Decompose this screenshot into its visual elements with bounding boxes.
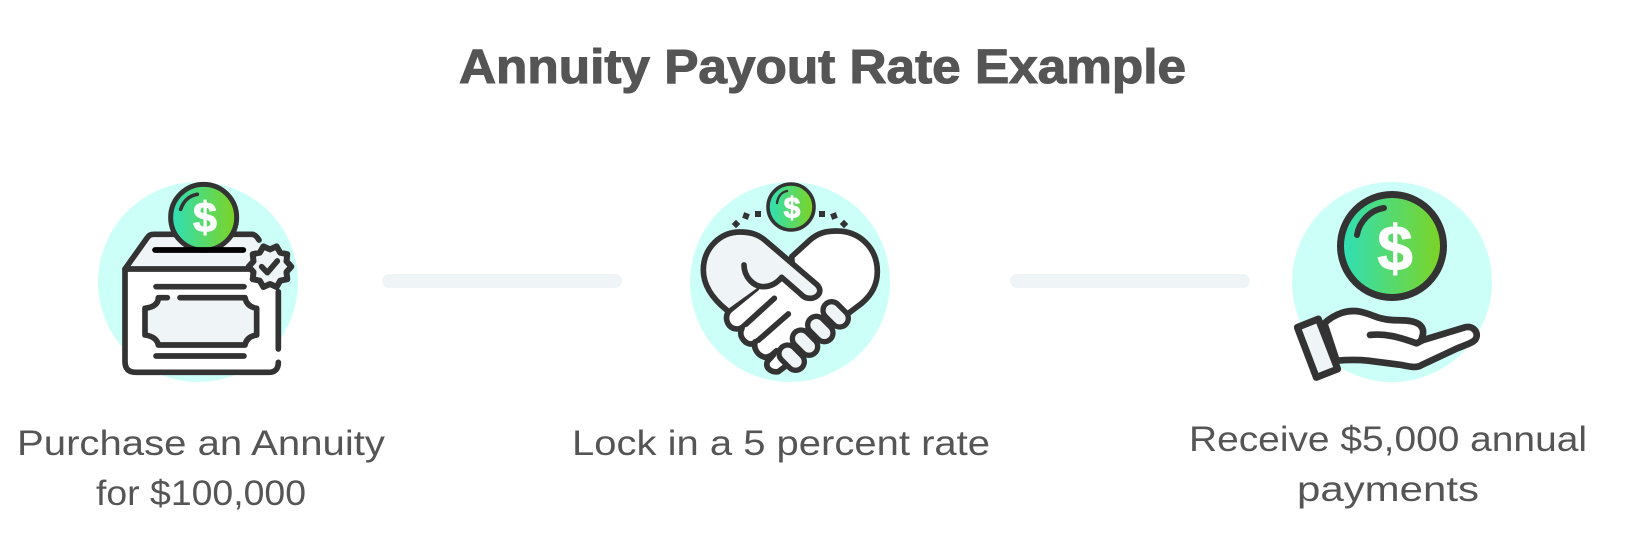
label: step 2: Lock in a 5 percent rate — [572, 424, 990, 463]
label: step 1: Purchase an Annuity — [17, 424, 386, 463]
label: step 3: payments — [1297, 470, 1479, 509]
icon: open hand receiving coin — [1292, 182, 1492, 382]
label: step 1: for $100,000 — [96, 474, 306, 513]
label: step 1 — [17, 424, 386, 513]
connector: step 1 to step 2 — [382, 274, 622, 288]
icon: handshake with coin — [690, 182, 890, 382]
connector: step 2 to step 3 — [1010, 274, 1250, 288]
title: Annuity Payout Rate Example — [459, 41, 1186, 94]
label: step 3 — [1189, 420, 1587, 509]
icon: handshake with coin: $ — [784, 192, 801, 225]
icon: annuity box with coin — [98, 182, 298, 382]
icon: annuity box with coin: $ — [193, 194, 217, 242]
icon: open hand receiving coin: $ — [1377, 212, 1413, 284]
label: step 3: Receive $5,000 annual — [1189, 420, 1587, 459]
